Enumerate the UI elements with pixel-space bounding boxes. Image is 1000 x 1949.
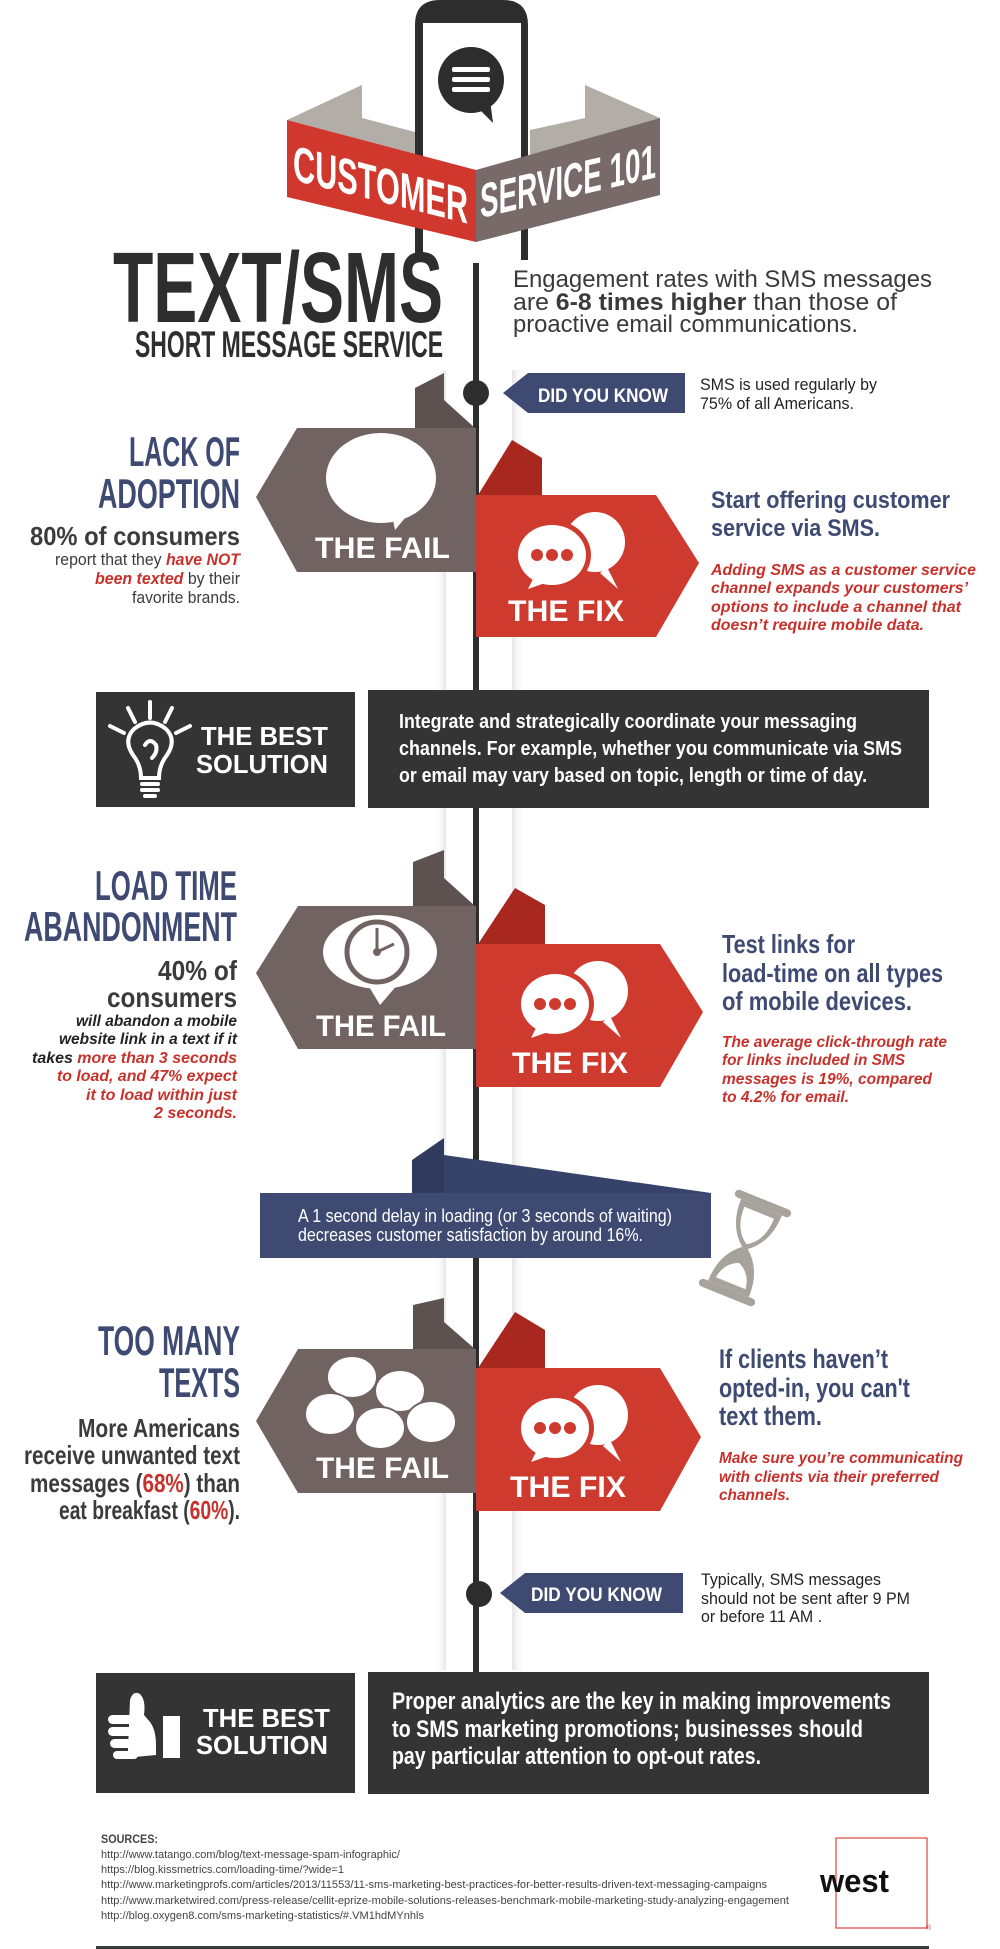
section 1: lack of adoption	[30, 373, 976, 637]
fix text: channel expands your customers’	[711, 580, 969, 597]
intro text: proactive email communications.	[513, 311, 858, 338]
banner text: customer: CUSTOMER	[293, 135, 468, 234]
icon: phone	[415, 0, 528, 263]
stat text: receive unwanted text	[24, 1440, 240, 1470]
timeline line	[473, 200, 479, 1675]
shadow column behind timeline	[434, 370, 526, 1670]
did you know 2: should not be sent after 9 PM	[701, 1589, 910, 1608]
sources	[101, 1832, 789, 1922]
stat text: been texted by their	[95, 569, 240, 588]
stat text: it to load within just	[86, 1087, 238, 1104]
fix text: doesn’t require mobile data.	[711, 617, 924, 634]
intro text: are 6-8 times higher than those of	[513, 289, 897, 316]
stat text: 2 seconds.	[153, 1105, 237, 1122]
fix text: Test links for	[722, 929, 855, 959]
fix text: options to include a channel that	[711, 599, 962, 616]
fix text: The average click-through rate	[722, 1034, 947, 1051]
stat text: will abandon a mobile	[76, 1013, 237, 1030]
logo: west: west	[819, 1863, 889, 1899]
fix text: service via SMS.	[711, 515, 880, 542]
best solution 1: Integrate and strategically coordinate your messaging	[399, 711, 857, 733]
stat text: More Americans	[78, 1413, 240, 1443]
fix text: messages is 19%, compared	[722, 1071, 933, 1088]
best solution 2: SOLUTION	[196, 1730, 328, 1760]
best solution 2: pay particular attention to opt-out rates.	[392, 1743, 761, 1770]
did you know 1	[463, 373, 877, 413]
sources: SOURCES:	[101, 1832, 158, 1846]
fix text: of mobile devices.	[722, 986, 912, 1016]
stat text: takes more than 3 seconds	[32, 1050, 237, 1067]
heading	[98, 1317, 240, 1406]
fix text	[710, 487, 976, 634]
intro text	[513, 266, 932, 338]
fix text: load-time on all types	[722, 958, 943, 988]
logo: west	[819, 1838, 932, 1932]
section 3: too many texts	[24, 1298, 963, 1525]
heading: TOO MANY	[98, 1317, 240, 1364]
fix text: Make sure you’re communicating	[719, 1450, 963, 1467]
fail panel	[256, 850, 476, 1049]
section 2: load time abandonment	[24, 850, 947, 1122]
fix text	[719, 1344, 963, 1504]
stat text	[24, 1413, 240, 1525]
sources: http://www.tatango.com/blog/text-message-spam-infographic/	[101, 1849, 401, 1861]
intro text: Engagement rates with SMS messages	[513, 266, 932, 293]
did you know 2: Typically, SMS messages	[701, 1570, 881, 1589]
fix text	[722, 929, 947, 1106]
fix text: to 4.2% for email.	[722, 1089, 849, 1106]
heading: LACK OF	[129, 428, 240, 475]
stat text: favorite brands.	[132, 588, 240, 607]
heading	[24, 862, 237, 950]
header: phone and banner	[287, 0, 660, 263]
title: TEXT/SMS	[113, 232, 443, 344]
banner red	[287, 120, 476, 242]
did you know 2	[466, 1570, 910, 1626]
did you know 2: DID YOU KNOW	[531, 1585, 662, 1606]
did you know 1: DID YOU KNOW	[538, 386, 668, 407]
fix panel	[476, 1312, 701, 1511]
fix text: text them.	[719, 1401, 822, 1431]
fix panel	[476, 440, 699, 637]
fail panel	[256, 373, 476, 572]
best solution 1: channels. For example, whether you communicate via SMS	[399, 738, 902, 760]
fix text: Adding SMS as a customer service	[710, 562, 976, 579]
fix panel: THE FIX	[508, 595, 624, 628]
sources: https://blog.kissmetrics.com/loading-time/?wide=1	[101, 1864, 344, 1876]
stat text: messages (68%) than	[30, 1468, 240, 1498]
heading: ABANDONMENT	[24, 903, 237, 950]
title	[113, 232, 443, 365]
best solution 1	[96, 690, 930, 828]
sources: http://www.marketwired.com/press-release/cellit-eprize-mobile-solutions-releases-benchmark-mobile-marketing-study-analyzing-engagement	[101, 1895, 789, 1907]
fail panel	[256, 1298, 476, 1493]
stat text: eat breakfast (60%).	[59, 1495, 240, 1525]
banner grey	[476, 118, 660, 242]
fix text: Start offering customer	[711, 487, 950, 514]
fix panel	[476, 888, 703, 1087]
banner text: service 101: SERVICE 101	[480, 135, 656, 229]
title: SHORT MESSAGE SERVICE	[135, 324, 443, 365]
icon: hourglass	[698, 1189, 792, 1307]
fix text: channels.	[719, 1487, 790, 1504]
footer bar	[96, 1946, 929, 1949]
stat text: website link in a text if it	[59, 1031, 238, 1048]
fail panel: THE FAIL	[316, 1452, 449, 1485]
best solution 2: Proper analytics are the key in making improvements	[392, 1688, 891, 1715]
fail panel: THE FAIL	[315, 532, 450, 565]
delay callout banner	[260, 1138, 711, 1258]
delay callout banner: A 1 second delay in loading (or 3 seconds of waiting)	[298, 1206, 672, 1226]
logo: west: ®	[926, 1924, 932, 1932]
icon: thumbs up	[108, 1693, 180, 1759]
best solution 2	[96, 1672, 930, 1816]
did you know 1: SMS is used regularly by	[700, 375, 877, 394]
fix text: opted-in, you can't	[719, 1373, 910, 1403]
heading: ADOPTION	[98, 470, 240, 517]
best solution 2: to SMS marketing promotions; businesses should	[392, 1716, 863, 1743]
stat text: consumers	[107, 982, 237, 1013]
stat text	[32, 955, 238, 1122]
fail panel: THE FAIL	[316, 1010, 446, 1043]
best solution 1: THE BEST	[201, 721, 328, 751]
did you know 1: 75% of all Americans.	[700, 394, 854, 413]
stat text: to load, and 47% expect	[57, 1068, 238, 1085]
fix text: for links included in SMS	[722, 1052, 905, 1069]
sources: http://www.marketingprofs.com/articles/2013/11553/11-sms-marketing-best-practices-for-better-results-driven-text-messaging-campaigns	[101, 1879, 767, 1891]
heading	[98, 428, 240, 517]
best solution 2: THE BEST	[203, 1703, 330, 1733]
did you know 2: or before 11 AM .	[701, 1607, 822, 1626]
best solution 1: or email may vary based on topic, length or time of day.	[399, 765, 867, 787]
heading: TEXTS	[159, 1359, 240, 1406]
sources: http://blog.oxygen8.com/sms-marketing-statistics/#.VM1hdMYnhls	[101, 1910, 424, 1922]
icon: grey arrows	[287, 85, 660, 155]
stat text: 40% of	[158, 955, 238, 986]
best solution 1: SOLUTION	[196, 749, 328, 779]
delay callout banner: decreases customer satisfaction by around 16%.	[298, 1225, 643, 1245]
fix panel: THE FIX	[512, 1047, 628, 1080]
stat text: 80% of consumers	[30, 521, 240, 551]
icon: lightbulb	[110, 702, 190, 796]
fix panel: THE FIX	[510, 1471, 626, 1504]
stat text: report that they have NOT	[55, 550, 242, 569]
fix text: with clients via their preferred	[719, 1469, 940, 1486]
stat text	[30, 521, 242, 607]
heading: LOAD TIME	[95, 862, 237, 909]
fix text: If clients haven’t	[719, 1344, 888, 1374]
